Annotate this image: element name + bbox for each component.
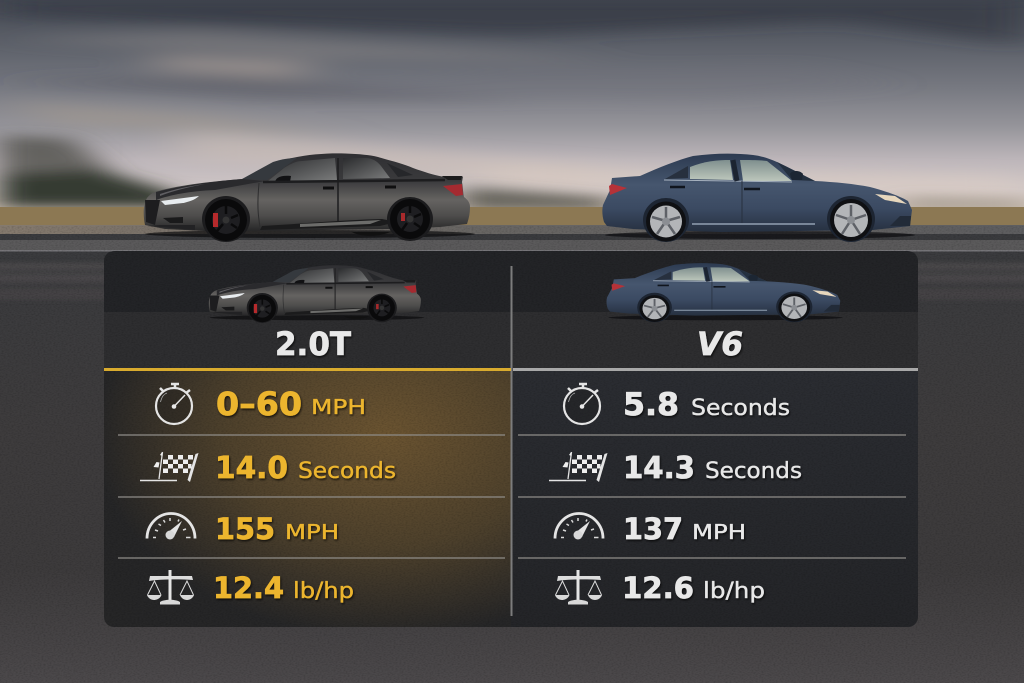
icon: checkered flag <box>140 452 198 482</box>
right column stats <box>549 384 802 605</box>
icon: speedometer <box>147 514 195 540</box>
background: road <box>0 225 1024 683</box>
stat: 14.0 Seconds: 14.0 <box>215 451 288 486</box>
left column stats <box>140 384 396 605</box>
column divider <box>510 266 512 616</box>
stat: 5.8 Seconds: Seconds <box>691 396 790 421</box>
stat: 12.4 lb/hp <box>213 571 354 605</box>
stat: 5.8 Seconds: 5.8 <box>623 387 679 423</box>
car: small blue V6 <box>607 263 843 322</box>
stat: 137 MPH <box>623 512 746 546</box>
icon: stopwatch <box>564 384 600 424</box>
stat: 12.4 lb/hp: lb/hp <box>293 579 354 604</box>
stat: 155 MPH <box>215 512 339 546</box>
stat: 14.0 Seconds <box>215 451 396 486</box>
stat: 155 MPH: 155 <box>215 512 275 546</box>
stat: 12.6 lb/hp <box>622 571 765 605</box>
right stats background <box>511 370 918 627</box>
heading: V6: V6 <box>697 325 743 363</box>
background: dry grass strip <box>0 207 1024 226</box>
stat: 14.0 Seconds: Seconds <box>298 459 396 484</box>
left stats background <box>104 370 511 627</box>
stat: 155 MPH: MPH <box>285 520 339 544</box>
panel: comparison table <box>104 251 918 627</box>
stat: 12.4 lb/hp: 12.4 <box>213 571 284 605</box>
stat: 0-60 MPH: MPH <box>311 395 366 419</box>
stat: 5.8 Seconds <box>623 387 790 423</box>
heading: 2.0T: 2.0T <box>275 325 351 363</box>
stat: 0-60 MPH: 0–60 <box>216 385 302 423</box>
car: large blue V6 sedan <box>602 154 915 242</box>
icon: speedometer <box>555 514 603 540</box>
icon: checkered flag <box>549 452 608 482</box>
icon: stopwatch <box>156 384 192 424</box>
stat: 12.6 lb/hp: lb/hp <box>703 579 765 604</box>
background: blurred tree line <box>0 135 1024 210</box>
car: large grey 2.0T sedan <box>144 153 475 242</box>
stat: 137 MPH: 137 <box>623 512 683 546</box>
header rule: V6 <box>513 368 918 371</box>
icon: balance scale <box>555 570 602 604</box>
stat: 14.3 Seconds: Seconds <box>705 459 802 484</box>
icon: balance scale <box>147 570 194 604</box>
header rule: 2.0T <box>104 368 511 371</box>
background: sky <box>0 0 1024 210</box>
stat: 12.6 lb/hp: 12.6 <box>622 571 694 605</box>
stat: 0-60 MPH <box>216 385 366 423</box>
car: small grey 2.0T <box>209 265 424 323</box>
stat: 14.3 Seconds: 14.3 <box>623 451 695 486</box>
stat: 137 MPH: MPH <box>692 520 746 544</box>
stat: 14.3 Seconds <box>623 451 802 486</box>
